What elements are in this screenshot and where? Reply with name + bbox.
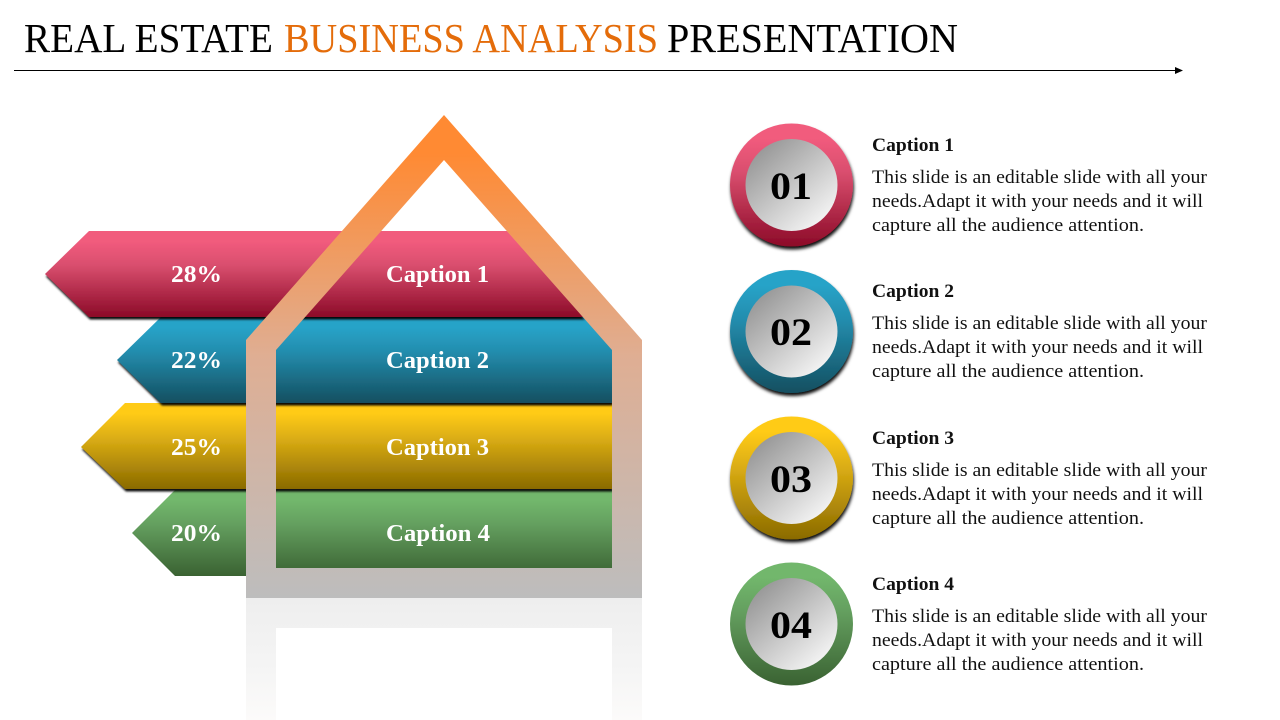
badge 02 bbox=[730, 270, 853, 393]
band labels: Caption 1 bbox=[386, 262, 489, 288]
text block: caption 2 bbox=[872, 282, 1207, 382]
band labels: 22% bbox=[171, 348, 222, 374]
text block: caption 2: needs.Adapt it with your needs and it will bbox=[872, 338, 1203, 358]
band labels: 20% bbox=[171, 521, 222, 547]
badge 03: 03 bbox=[770, 458, 812, 501]
text block: caption 2: capture all the audience attention. bbox=[872, 362, 1144, 382]
title: PRESENTATION bbox=[667, 15, 958, 61]
text block: caption 3 bbox=[872, 429, 1207, 529]
band labels: 28% bbox=[171, 262, 222, 288]
band labels: Caption 3 bbox=[386, 435, 489, 461]
badge 04 bbox=[730, 562, 853, 686]
house outline bbox=[246, 115, 642, 598]
badge 04: 04 bbox=[770, 604, 812, 647]
text block: caption 3: capture all the audience attention. bbox=[872, 509, 1144, 529]
badge 03 bbox=[730, 416, 853, 540]
band labels: Caption 2 bbox=[386, 348, 489, 374]
band labels: 25% bbox=[171, 435, 222, 461]
house reflection bbox=[246, 598, 642, 720]
arrow band: caption 3 bbox=[81, 403, 612, 489]
band labels: Caption 4 bbox=[386, 521, 490, 547]
text block: caption 2: This slide is an editable slide with all your bbox=[872, 314, 1207, 334]
arrow band: caption 2 bbox=[117, 317, 612, 403]
text block: caption 3: Caption 3 bbox=[872, 429, 954, 449]
text block: caption 4 bbox=[872, 575, 1207, 675]
text block: caption 1: Caption 1 bbox=[872, 136, 954, 156]
text block: caption 1: capture all the audience attention. bbox=[872, 216, 1144, 236]
badge 01 bbox=[730, 124, 853, 246]
title: REAL ESTATE bbox=[24, 15, 273, 61]
text block: caption 1: needs.Adapt it with your needs and it will bbox=[872, 192, 1203, 212]
badge 02: 02 bbox=[770, 311, 812, 354]
text block: caption 4: This slide is an editable slide with all your bbox=[872, 607, 1207, 627]
arrow band: caption 1 bbox=[45, 231, 584, 317]
text block: caption 4: Caption 4 bbox=[872, 575, 954, 595]
text block: caption 3: This slide is an editable slide with all your bbox=[872, 461, 1207, 481]
arrow: title underline bbox=[14, 67, 1183, 74]
title: BUSINESS ANALYSIS bbox=[284, 15, 658, 61]
badge 01: 01 bbox=[770, 165, 812, 208]
text block: caption 4: needs.Adapt it with your needs and it will bbox=[872, 631, 1203, 651]
text block: caption 1 bbox=[872, 136, 1207, 236]
title bbox=[24, 15, 958, 61]
text block: caption 1: This slide is an editable slide with all your bbox=[872, 168, 1207, 188]
text block: caption 2: Caption 2 bbox=[872, 282, 954, 302]
arrow band: caption 4 bbox=[132, 490, 612, 576]
text block: caption 4: capture all the audience attention. bbox=[872, 655, 1144, 675]
band labels bbox=[171, 262, 490, 547]
text block: caption 3: needs.Adapt it with your needs and it will bbox=[872, 485, 1203, 505]
